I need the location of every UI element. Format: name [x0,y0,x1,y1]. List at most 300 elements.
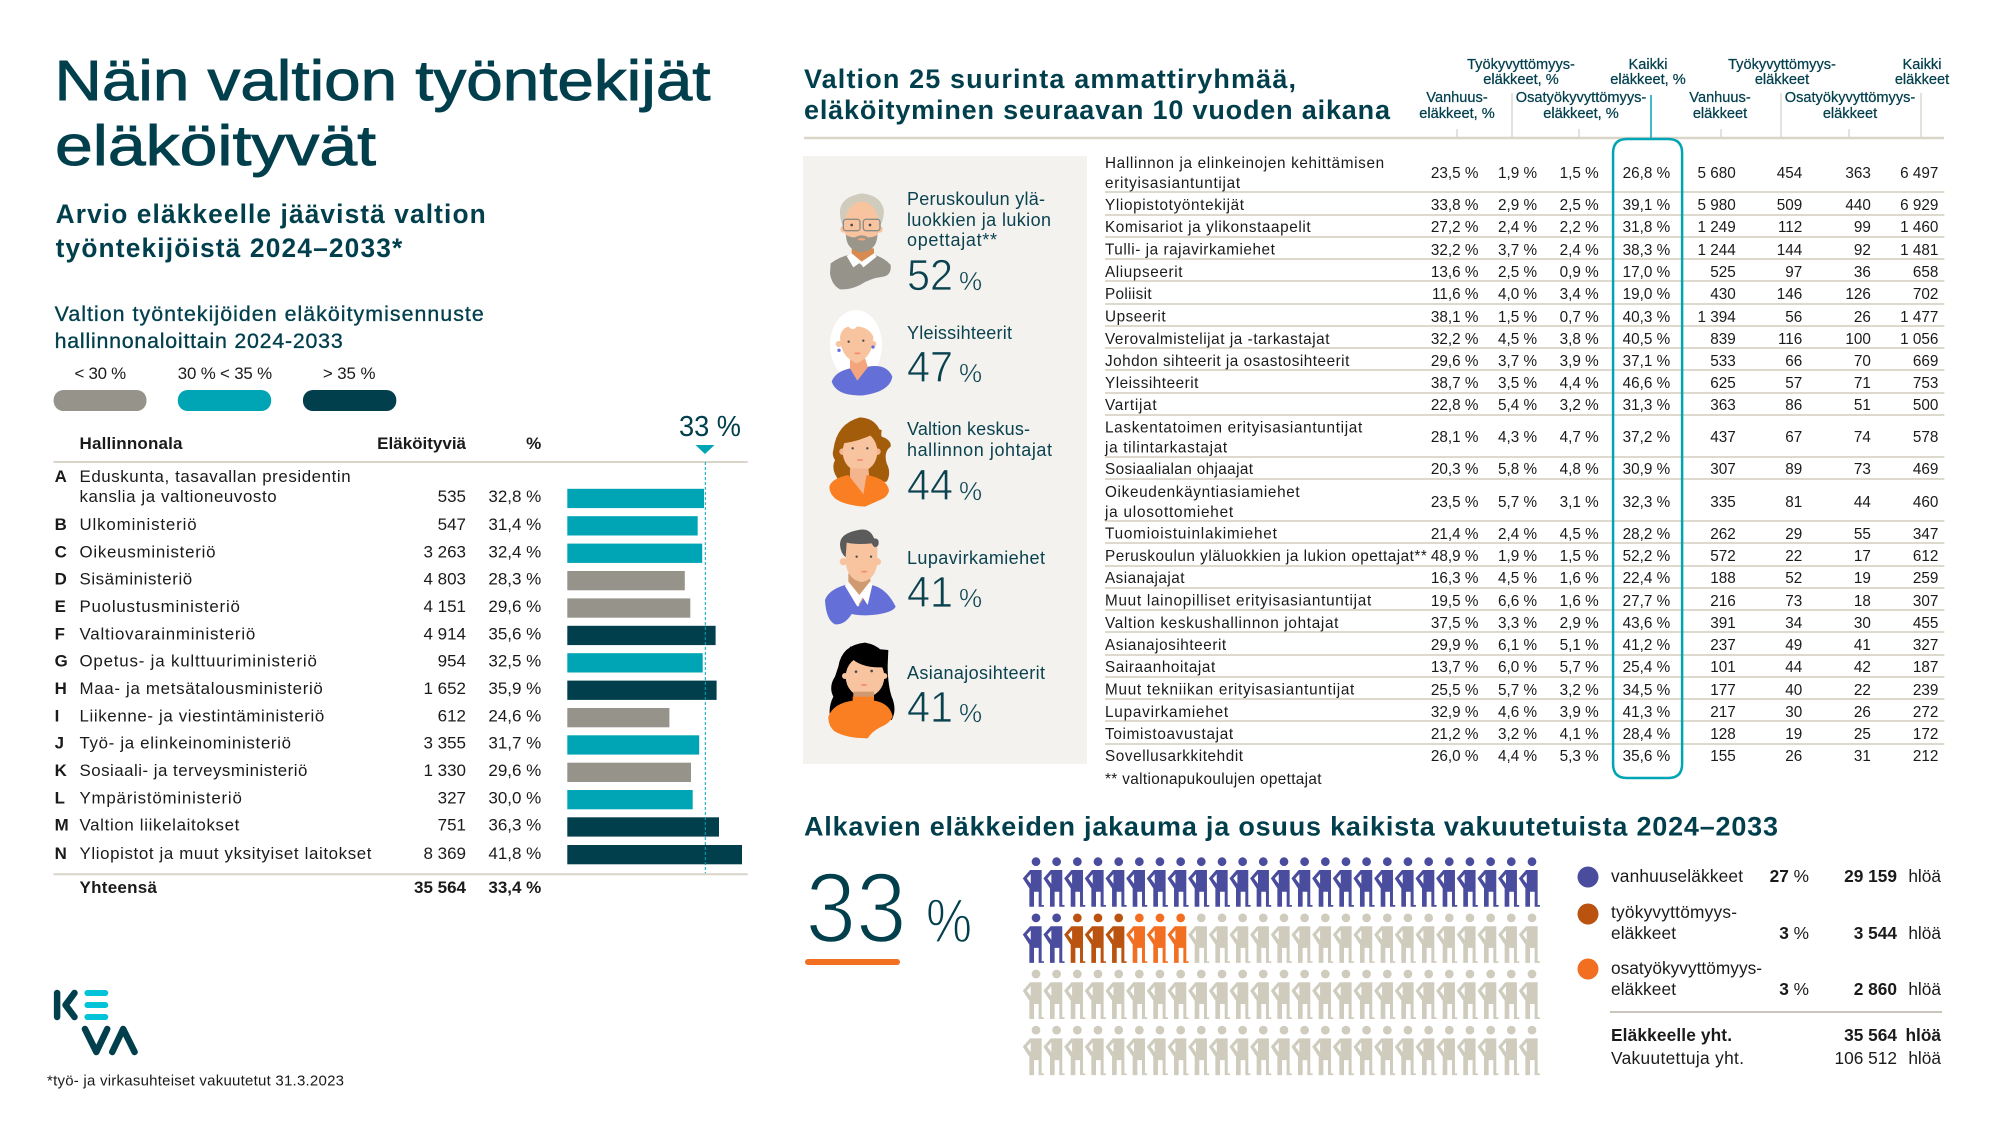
column headers: eläkkeet, % [1543,106,1619,122]
branch names: Oikeusministeriö [79,542,216,561]
percentages: 32,5 % [488,652,541,671]
column headers: eläkkeet, % [1610,72,1686,88]
legend: pension types: työkyvyttömyys- [1611,902,1737,922]
legend: pension types: 3 % [1779,923,1809,943]
column: old-age pension %: 26,0 % [1431,748,1479,765]
column: partial disability pensions count: 70 [1854,353,1871,370]
column: all pensions count: 753 [1913,375,1938,392]
column: disability pensions count: 73 [1785,593,1802,610]
column: partial disability pension %: 5,7 % [1560,659,1599,676]
column: disability pension %: 1,9 % [1498,165,1537,182]
column: disability pensions count: 26 [1785,748,1802,765]
row letters: J [55,734,64,753]
row letters [55,467,69,863]
column: disability pension %: 5,8 % [1498,461,1537,478]
column: old-age pension %: 22,8 % [1431,397,1479,414]
text: teachers [907,189,1051,300]
column: old-age pension %: 20,3 % [1431,461,1479,478]
column: disability pension %: 2,5 % [1498,264,1537,281]
column: disability pension %: 3,3 % [1498,615,1537,632]
column: partial disability pension %: 1,5 % [1560,165,1599,182]
column: disability pensions count: 454 [1777,165,1803,182]
percentages: 31,4 % [488,515,541,534]
row letters: G [55,652,68,671]
legend: pension types: eläkkeet [1611,979,1676,999]
legend: pension types: 29 159 [1844,866,1897,886]
row letters: D [55,570,67,589]
column: old-age pension %: 21,4 % [1431,526,1479,543]
column: partial disability pensions count: 36 [1854,264,1871,281]
row letters: B [55,515,67,534]
column: partial disability pension %: 4,7 % [1560,429,1599,446]
column: disability pension %: 4,6 % [1498,704,1537,721]
column: old-age pensions count: 1 244 [1698,242,1736,259]
column headers: eläkkeet, % [1419,106,1495,122]
column: disability pension %: 4,3 % [1498,429,1537,446]
column: old-age pension %: 32,2 % [1431,331,1479,348]
column: partial disability pension %: 5,1 % [1560,637,1599,654]
column: partial disability pension %: 3,1 % [1560,494,1599,511]
column headers: Kaikki [1903,57,1941,73]
column: all pensions count: 239 [1913,682,1938,699]
column: all pensions count: 469 [1913,461,1938,478]
legend: pension types: 35 564 [1844,1025,1897,1045]
column: old-age pension %: 16,3 % [1431,570,1479,587]
text: teachers: opettajat** [907,230,997,250]
column: disability pension %: 3,2 % [1498,726,1537,743]
column headers: eläkkeet [1823,106,1877,122]
legend: pension types: Vakuutettuja yht. [1611,1048,1744,1068]
title: Näin valtion työntekijät [54,49,711,113]
text: teachers: % [959,266,982,296]
column: partial disability pensions count: 73 [1854,461,1871,478]
column: all pensions %: 40,3 % [1623,309,1671,326]
column: all pensions %: 27,7 % [1623,593,1671,610]
column: disability pensions count: 34 [1785,615,1803,632]
column: all pensions %: 40,5 % [1623,331,1671,348]
occupation names: Sosiaalialan ohjaajat [1105,461,1254,478]
column: all pensions count: 455 [1913,615,1938,632]
column: disability pension %: 2,4 % [1498,219,1537,236]
column: old-age pensions count: 155 [1710,748,1736,765]
subtitle: työntekijöistä 2024–2033* [56,233,403,263]
column: all pensions count: 500 [1913,397,1938,414]
column: partial disability pensions count: 42 [1854,659,1871,676]
column: all pensions %: 46,6 % [1623,375,1671,392]
branch names: Sosiaali- ja terveysministeriö [79,761,307,780]
column: old-age pensions count: 177 [1710,682,1736,699]
column: partial disability pension %: 3,9 % [1560,353,1599,370]
table header: Eläköityviä [377,434,467,453]
reference marker: 33 %: 33 % [679,411,741,443]
column: disability pensions count: 44 [1785,659,1803,676]
column: disability pensions count: 86 [1785,397,1802,414]
column: partial disability pension %: 4,1 % [1560,726,1599,743]
column: partial disability pensions count: 440 [1845,197,1871,214]
occupation names: Muut tekniikan erityisasiantuntijat [1105,681,1355,699]
column: all pensions count [1900,165,1938,765]
column: disability pensions count: 116 [1778,331,1802,348]
column: old-age pensions count: 237 [1710,637,1736,654]
legend: pension types: 3 544 [1854,923,1897,943]
column: partial disability pensions count [1845,165,1871,765]
text: managers: hallinnon johtajat [907,440,1052,460]
column headers: Työkyvyttömyys- [1467,57,1575,73]
text: legal secretaries: % [959,698,982,728]
counts of retirees: 327 [438,788,466,807]
column: disability pensions count: 57 [1785,375,1802,392]
column: all pensions count: 187 [1913,659,1938,676]
column: all pensions %: 28,2 % [1623,526,1671,543]
column: all pensions %: 34,5 % [1623,682,1671,699]
row letters: I [55,706,59,725]
column: old-age pensions count [1698,165,1736,765]
column: old-age pension %: 29,6 % [1431,353,1479,370]
column: old-age pensions count: 188 [1710,570,1736,587]
column: old-age pension %: 21,2 % [1431,726,1479,743]
text: secretaries: % [959,358,982,388]
column: partial disability pensions count: 100 [1845,331,1871,348]
column: old-age pension %: 13,7 % [1431,659,1479,676]
column: old-age pension %: 32,9 % [1431,704,1479,721]
column: old-age pension %: 25,5 % [1431,682,1479,699]
column: partial disability pensions count: 26 [1854,704,1871,721]
column: disability pensions count: 112 [1778,219,1802,236]
percentages: 31,7 % [488,734,541,753]
column: old-age pensions count: 216 [1710,593,1736,610]
occupation names: Asianajosihteerit [1105,637,1227,654]
column: disability pensions count: 49 [1785,637,1802,654]
column: partial disability pension %: 1,6 % [1560,570,1599,587]
column: partial disability pension % [1560,165,1599,765]
column: partial disability pension %: 0,9 % [1560,264,1599,281]
column: partial disability pensions count: 99 [1854,219,1871,236]
occupation names: erityisasiantuntijat [1105,175,1241,192]
occupation names: Muut lainopilliset erityisasiantuntijat [1105,592,1372,610]
column: all pensions count: 702 [1913,286,1938,303]
occupation names: ja tilintarkastajat [1104,439,1228,457]
legend: percentage ranges: > 35 % [323,364,375,383]
counts of retirees: 547 [438,515,466,534]
text: licensing officers: 41 [907,568,953,617]
person: legal secretary [828,643,894,738]
row letters: L [55,788,65,807]
column: partial disability pensions count: 18 [1854,593,1871,610]
column headers: Vanhuus- [1426,90,1488,106]
column headers: eläkkeet [1693,106,1747,122]
counts of retirees: 4 914 [423,624,466,643]
column: partial disability pension %: 3,4 % [1560,286,1599,303]
column: partial disability pensions count: 92 [1854,242,1871,259]
column: partial disability pension %: 4,4 % [1560,375,1599,392]
column: old-age pensions count: 525 [1710,264,1736,281]
column: all pensions %: 37,1 % [1623,353,1671,370]
column: all pensions %: 28,4 % [1623,726,1671,743]
counts of retirees: 1 330 [423,761,466,780]
heading: distribution of starting pensions: Alkavien eläkkeiden jakauma ja osuus kaikista vakuutetuista 2024–2033 [804,812,1778,842]
column headers: Osatyökyvyttömyys- [1516,90,1646,106]
person: manager [829,417,891,507]
title [54,49,711,178]
row letters: F [55,624,65,643]
footnote: insured: *työ- ja virkasuhteiset vakuutetut 31.3.2023 [47,1072,344,1090]
occupation names: Aliupseerit [1105,264,1183,281]
panel: occupations with highest retirement share [803,156,1087,764]
table header [80,434,541,453]
text: managers [907,419,1052,510]
column: disability pensions count [1777,165,1803,765]
column: disability pension %: 3,7 % [1498,242,1537,259]
column headers: Kaikki [1629,57,1667,73]
column: disability pension %: 5,4 % [1498,397,1537,414]
column: partial disability pensions count: 55 [1854,526,1871,543]
column: disability pensions count: 81 [1785,494,1802,511]
column: all pensions %: 26,8 % [1623,165,1671,182]
column headers: eläkkeet [1895,72,1949,88]
occupation names: Sovellusarkkitehdit [1105,748,1244,765]
branch names: Puolustusministeriö [79,597,240,616]
column: old-age pension % [1431,165,1479,765]
occupation names [1104,155,1427,765]
logo: Keva [57,990,135,1052]
column: all pensions count: 658 [1913,264,1938,281]
legend: pension types: 27 % [1770,866,1809,886]
legend: pension types: vanhuuseläkkeet [1611,866,1743,886]
column: disability pension %: 1,5 % [1498,309,1537,326]
legend: pension types: osatyökyvyttömyys- [1611,958,1762,978]
heading: 25 largest occupational groups: eläköityminen seuraavan 10 vuoden aikana [804,95,1391,125]
legend: pension types: eläkkeet [1611,923,1676,943]
column: all pensions %: 32,3 % [1623,494,1671,511]
column: old-age pension %: 23,5 % [1431,165,1479,182]
heading: forecast by administrative branch [55,302,484,353]
occupation names: Valtion keskushallinnon johtajat [1105,615,1339,632]
counts of retirees: 751 [438,816,466,835]
row letters: C [55,542,67,561]
legend: percentage ranges: 30 % < 35 % [178,364,272,383]
column: partial disability pensions count: 51 [1854,397,1871,414]
column headers: eläkkeet [1755,72,1809,88]
percentages [488,487,541,863]
heading: forecast by administrative branch: Valtion työntekijöiden eläköitymisennuste [55,302,484,326]
column: old-age pension %: 13,6 % [1431,264,1479,281]
column: all pensions %: 30,9 % [1623,461,1671,478]
percentages: 35,9 % [488,679,541,698]
percentages: 36,3 % [488,816,541,835]
table: administrative branches [54,434,748,897]
column: partial disability pension %: 3,2 % [1560,682,1599,699]
occupation names: Lupavirkamiehet [1105,704,1229,721]
bar chart [567,462,742,874]
text: managers: % [959,476,982,506]
occupation names: Laskentatoimen erityisasiantuntijat [1105,419,1363,437]
column: old-age pensions count: 572 [1710,548,1736,565]
column headers [1419,57,1949,137]
table header: Hallinnonala [80,434,183,453]
column: disability pension %: 4,5 % [1498,570,1537,587]
column: all pensions count: 669 [1913,353,1938,370]
subtitle [56,199,486,263]
column: all pensions %: 25,4 % [1623,659,1671,676]
column: disability pension % [1498,165,1537,765]
branch names: Maa- ja metsätalousministeriö [79,679,323,698]
legend: pension types: 2 860 [1854,979,1897,999]
column: old-age pension %: 11,6 % [1432,286,1479,303]
column: disability pensions count: 22 [1785,548,1802,565]
column: all pensions count: 347 [1913,526,1938,543]
column: all pensions count: 272 [1913,704,1938,721]
legend: pension types: hlöä [1908,1048,1941,1068]
occupation names: Tulli- ja rajavirkamiehet [1105,241,1276,259]
row letters: H [55,679,67,698]
column headers: Vanhuus- [1689,90,1751,106]
text: teachers: Peruskoulun ylä- [907,189,1045,209]
column: old-age pensions count: 533 [1710,353,1736,370]
occupation names: Hallinnon ja elinkeinojen kehittämisen [1105,155,1384,172]
column headers: eläkkeet, % [1483,72,1559,88]
legend: percentage ranges [54,364,396,411]
column: old-age pensions count: 625 [1710,375,1736,392]
column: all pensions %: 19,0 % [1623,286,1671,303]
column: partial disability pension %: 1,6 % [1560,593,1599,610]
column: disability pension %: 5,7 % [1498,494,1537,511]
big number: 33 %: % [926,887,972,956]
occupation names: Yleissihteerit [1105,375,1199,392]
column: old-age pension %: 28,1 % [1431,429,1479,446]
person: licensing officer [825,529,896,624]
branch names: Ympäristöministeriö [79,788,242,807]
column: old-age pension %: 23,5 % [1431,494,1479,511]
table header: % [526,434,541,453]
column: all pensions %: 17,0 % [1623,264,1671,281]
branch names: Opetus- ja kulttuuriministeriö [79,652,317,671]
column: disability pension %: 6,0 % [1498,659,1537,676]
column: disability pension %: 3,7 % [1498,353,1537,370]
legend: pension types: 106 512 [1835,1048,1897,1068]
heading: forecast by administrative branch: hallinnonaloittain 2024-2033 [55,329,343,353]
column: partial disability pension %: 5,3 % [1560,748,1599,765]
column: old-age pensions count: 307 [1710,461,1736,478]
column: disability pensions count: 509 [1777,197,1802,214]
percentages: 29,6 % [488,597,541,616]
column: partial disability pensions count: 19 [1854,570,1871,587]
column: all pensions count: 1 481 [1900,242,1938,259]
column: disability pension %: 3,5 % [1498,375,1537,392]
text: managers: 44 [907,461,953,510]
row letters: M [55,816,69,835]
column: disability pensions count: 56 [1785,309,1802,326]
counts of retirees: 1 652 [423,679,466,698]
column: old-age pension %: 38,1 % [1431,309,1479,326]
column: all pensions count: 212 [1913,748,1938,765]
column: old-age pensions count: 5 680 [1698,165,1736,182]
column: old-age pension %: 38,7 % [1431,375,1479,392]
column: disability pensions count: 40 [1785,682,1802,699]
column: disability pension %: 2,9 % [1498,197,1537,214]
row letters: N [55,844,67,863]
column headers: Osatyökyvyttömyys- [1785,90,1915,106]
person: secretary [830,310,892,395]
branch names: Valtion liikelaitokset [79,816,240,835]
legend: pension types: hlöä [1908,866,1941,886]
column: old-age pensions count: 437 [1710,429,1736,446]
counts of retirees: 954 [438,652,466,671]
column: disability pensions count: 144 [1777,242,1803,259]
text: secretaries: Yleissihteerit [907,323,1012,343]
column: disability pension %: 4,5 % [1498,331,1537,348]
occupation names: Verovalmistelijat ja -tarkastajat [1105,331,1330,348]
column: all pensions count: 6 497 [1900,165,1938,182]
column: old-age pensions count: 217 [1710,704,1736,721]
branch names: Yliopistot ja muut yksityiset laitokset [79,844,372,863]
percentages: 30,0 % [488,788,541,807]
counts of retirees: 535 [438,487,466,506]
percentages: 29,6 % [488,761,541,780]
occupation names: Sairaanhoitajat [1105,659,1216,676]
column: all pensions count: 259 [1913,570,1938,587]
percentages: 35,6 % [488,624,541,643]
occupation names: Peruskoulun yläluokkien ja lukion opettajat** [1105,548,1427,565]
column: old-age pension %: 48,9 % [1431,548,1479,565]
row letters: K [55,761,68,780]
column: disability pensions count: 30 [1785,704,1802,721]
branch names: Valtiovarainministeriö [79,624,255,643]
column: partial disability pensions count: 26 [1854,309,1871,326]
column: partial disability pensions count: 25 [1854,726,1871,743]
column: disability pensions count: 19 [1785,726,1802,743]
row letters: E [55,597,66,616]
row rules [1105,192,1944,744]
column: all pensions %: 22,4 % [1623,570,1671,587]
column: disability pension %: 4,4 % [1498,748,1537,765]
column: old-age pensions count: 335 [1710,494,1736,511]
occupation names: Tuomioistuinlakimiehet [1105,525,1278,543]
column: partial disability pension %: 2,9 % [1560,615,1599,632]
column: partial disability pensions count: 22 [1854,682,1871,699]
column: disability pensions count: 146 [1777,286,1802,303]
column: partial disability pension %: 3,8 % [1560,331,1599,348]
column: old-age pension %: 29,9 % [1431,637,1479,654]
occupation names: Poliisit [1105,286,1152,303]
column: partial disability pension %: 2,5 % [1560,197,1599,214]
legend: pension types: Eläkkeelle yht. [1611,1025,1732,1045]
text: licensing officers [907,548,1045,617]
column: old-age pension %: 33,8 % [1431,197,1479,214]
percentages: 41,8 % [488,844,541,863]
column: partial disability pensions count: 74 [1854,429,1871,446]
occupation names: Johdon sihteerit ja osastosihteerit [1105,353,1350,370]
column: all pensions count: 1 460 [1900,219,1938,236]
highlight box: all pensions column [1613,95,1682,778]
column: partial disability pensions count: 31 [1854,748,1871,765]
occupation names: ja ulosottomiehet [1104,504,1234,521]
column: old-age pensions count: 101 [1710,659,1736,676]
table: 25 occupational groups [1104,95,1944,788]
percentages: 32,8 % [488,487,541,506]
occupation names: Yliopistotyöntekijät [1105,197,1245,214]
column: partial disability pension %: 0,7 % [1560,309,1599,326]
heading: 25 largest occupational groups [804,64,1391,125]
column: partial disability pension %: 2,4 % [1560,242,1599,259]
legend: pension types: 3 % [1779,979,1809,999]
column: all pensions %: 38,3 % [1623,242,1671,259]
big number: 33 % [805,852,972,965]
big number: 33 %: 33 [806,852,906,963]
text: secretaries [907,323,1012,392]
column: all pensions count: 578 [1913,429,1938,446]
pictogram: share of retirees among insured [1023,857,1540,1075]
footnote: teachers: ** valtionapukoulujen opettajat [1105,771,1322,788]
